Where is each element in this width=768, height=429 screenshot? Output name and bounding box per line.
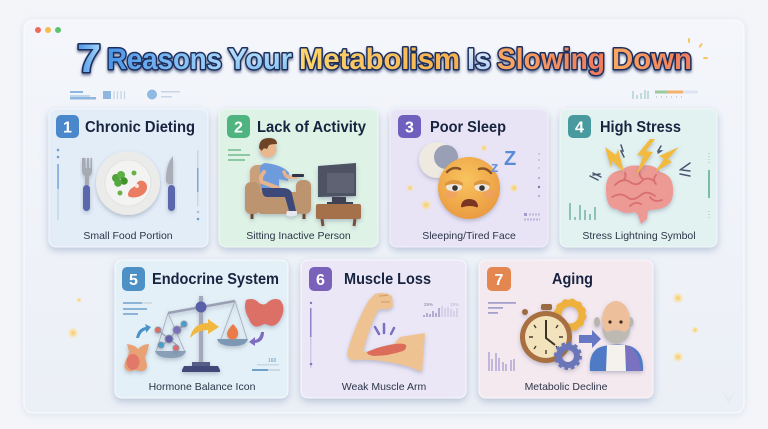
card 1: chronic dieting	[49, 109, 208, 247]
text lines 7	[488, 302, 516, 314]
title	[77, 37, 692, 81]
title: Reasons	[107, 43, 222, 76]
window control dots	[35, 27, 61, 33]
side indicator 6	[310, 302, 312, 368]
icon: weakness marks	[375, 324, 394, 334]
icon: elderly man	[590, 301, 643, 371]
icon: zzz: Z	[504, 148, 516, 170]
mini bars 7	[489, 352, 514, 371]
icon: blue gear	[556, 344, 580, 368]
icon: arrow	[579, 330, 601, 348]
heading 5: Endocrine System	[152, 271, 279, 288]
title: Is	[467, 43, 491, 76]
icon: moon	[419, 142, 458, 178]
badge 4	[568, 115, 591, 138]
icon: fork	[82, 158, 92, 211]
icon: balance scale	[155, 296, 248, 372]
mini metric 5	[252, 358, 280, 371]
mini chart 6: 25%	[424, 302, 433, 307]
decorative glow dots	[67, 292, 737, 405]
heading 3: Poor Sleep	[430, 119, 506, 136]
card 3: poor sleep	[390, 109, 548, 247]
badge 3	[398, 115, 421, 138]
icon: stress marks	[590, 145, 690, 180]
title: Down	[612, 43, 692, 76]
badge 4: 4	[575, 120, 584, 136]
badge 7: 7	[495, 272, 504, 289]
heading 7: Aging	[552, 271, 593, 288]
icon: weak arm	[348, 293, 425, 372]
icon: brain	[606, 165, 673, 224]
badge 3: 3	[405, 120, 414, 136]
caption 5: Hormone Balance Icon	[149, 381, 256, 393]
caption 1: Small Food Portion	[83, 230, 173, 242]
badge 2: 2	[234, 120, 243, 136]
card 6: muscle loss	[301, 260, 466, 398]
badge 5	[122, 267, 145, 291]
heading 6: Muscle Loss	[344, 271, 431, 288]
icon: lightning bolts	[605, 139, 679, 176]
icon: plate with small food	[96, 151, 160, 215]
heading 1: Chronic Dieting	[85, 119, 195, 136]
badge 6: 6	[316, 272, 325, 289]
badge 5: 5	[129, 272, 138, 289]
card 7: aging	[479, 260, 653, 398]
icon: molecule	[155, 321, 187, 351]
mini bars 4	[570, 153, 709, 220]
icon: zzz	[491, 148, 516, 176]
icon: person on armchair	[245, 138, 311, 219]
text lines 5	[123, 302, 152, 315]
icon: knife	[166, 156, 175, 211]
caption 4: Stress Lightning Symbol	[582, 230, 696, 242]
icon: thyroid gland	[245, 299, 284, 327]
icon: tired face	[438, 157, 500, 219]
mini metric 5: 160	[268, 358, 277, 364]
title: Slowing	[497, 43, 605, 76]
title: Your	[228, 43, 292, 76]
mini chart right	[633, 90, 698, 99]
mini chart left	[70, 90, 180, 100]
icon: yellow arrow	[190, 319, 219, 338]
icon: small arrows	[136, 324, 264, 346]
mini chart 6: 15%	[450, 302, 459, 307]
card 4: high stress	[560, 109, 717, 247]
title sparkles	[688, 38, 708, 59]
badge 1	[56, 115, 79, 138]
side indicators 1	[57, 149, 199, 220]
caption 2: Sitting Inactive Person	[246, 230, 351, 242]
badge 1: 1	[63, 120, 72, 136]
heading 4: High Stress	[600, 119, 681, 136]
title: Metabolism	[299, 43, 460, 76]
caption 3: Sleeping/Tired Face	[422, 230, 516, 242]
icon: stopwatch	[520, 304, 572, 363]
card 5: endocrine system	[115, 260, 288, 398]
icon: zzz: z	[491, 159, 498, 176]
caption 6: Weak Muscle Arm	[342, 381, 426, 393]
badge 7	[487, 267, 511, 291]
heading 2: Lack of Activity	[257, 119, 366, 136]
icon: yellow gear	[555, 300, 585, 330]
glow dots 3	[406, 144, 519, 211]
icon: television	[316, 163, 361, 226]
icon: gland	[124, 344, 149, 371]
mini dots 3	[524, 153, 540, 220]
caption 7: Metabolic Decline	[525, 381, 608, 393]
badge 6	[309, 267, 332, 291]
badge 2	[227, 115, 250, 138]
card 2: lack of activity	[219, 109, 378, 247]
title: 7	[77, 37, 101, 81]
mini chart 6	[424, 302, 459, 317]
text lines 2	[228, 149, 250, 161]
